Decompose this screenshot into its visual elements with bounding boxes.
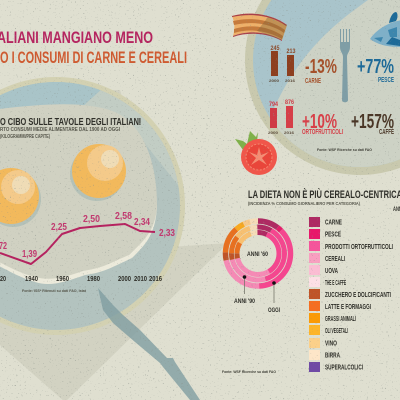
source note: trends: Fonte: WSF Ricerche su dati FAO (317, 148, 372, 152)
bars: fruit and vegetables: 2016 (284, 130, 295, 135)
line chart: food quantity: 1980 (87, 276, 100, 283)
legend: food categories: CARNE (325, 220, 342, 226)
donut labels (234, 251, 280, 314)
stat: fruit and vegetables: ORTOFRUTTICOLI (302, 129, 343, 136)
heading: food on tables (0, 117, 141, 140)
icon: tomato (235, 131, 277, 175)
title (0, 28, 187, 67)
title: O I CONSUMI DI CARNE E CEREALI (0, 48, 187, 67)
legend: food categories (309, 217, 393, 372)
bars: meat (269, 46, 296, 83)
line chart: food quantity: 2016 (149, 276, 162, 283)
bars: fruit and vegetables: 876 (285, 100, 295, 106)
line chart: food quantity: 1960 (56, 276, 69, 283)
bars: meat: 2000 (269, 78, 280, 83)
bars: meat: 213 (286, 49, 296, 55)
legend: food categories: PESCE (325, 232, 341, 238)
line chart: food quantity: 20 (0, 276, 6, 283)
icon: bacon (232, 14, 287, 41)
legend: food categories: OLI VEGETALI (325, 328, 348, 335)
line chart: food quantity (0, 211, 175, 293)
bars: fruit and vegetables (268, 100, 295, 135)
icon: fork (340, 29, 350, 102)
ring: nineties (232, 227, 284, 280)
line chart: food quantity: 2,58 (115, 211, 132, 222)
egg white (0, 205, 157, 284)
line chart: food quantity: 2,25 (51, 222, 67, 233)
line chart: food quantity: 1,39 (22, 249, 37, 260)
legend: food categories: GRASSI ANIMALI (325, 316, 356, 323)
source note: diet: Fonte: WSF Ricerche su dati FAO (222, 370, 276, 374)
heading: diet: (INCIDENZA % CONSUMO GIORNALIERO PER CATEGORIA) (248, 201, 360, 206)
line chart: food quantity: 2010 (134, 276, 147, 283)
icon: fish (370, 12, 400, 47)
legend: food categories: BIRRA (325, 352, 340, 360)
heading: food on tables: RTO CONSUMI MEDIE ALIMENTARE DAL 1900 AD OGGI (0, 127, 121, 133)
line chart: food quantity: 2,33 (159, 228, 175, 239)
line chart: food quantity: Fonte: ISS* Ritenuti su dati FAO, Istat (22, 289, 87, 293)
ring: today (226, 221, 290, 286)
donut labels: ANNI '60 (247, 251, 268, 258)
title: ALIANI MANGIANO MENO (0, 28, 153, 47)
plate: trends panel (245, 0, 400, 190)
line chart: food quantity: 2,34 (134, 217, 150, 228)
ring: sixties (237, 232, 279, 274)
heading: food on tables: (KILOGRAMMI/PRE CAPITE) (0, 134, 50, 140)
heading: diet (248, 188, 400, 213)
egg yolk left (0, 168, 41, 227)
legend: food categories: VINO (325, 340, 337, 348)
line chart: food quantity: 2000 (118, 276, 131, 283)
legend: food categories: SUPERALCOLICI (325, 364, 363, 372)
donut labels: OGGI (268, 307, 280, 314)
knife (98, 288, 200, 400)
legend: food categories: LATTE E FORMAGGI (325, 304, 371, 311)
stat: meat (305, 56, 337, 85)
bars: fruit and vegetables: 2000 (268, 130, 279, 135)
donut labels: ANNI '90 (234, 298, 255, 305)
stat: meat: -13% (305, 56, 337, 78)
line chart: food quantity: 1940 (25, 276, 38, 283)
bars: fruit and vegetables: 794 (269, 102, 279, 108)
plate: food on Italian tables (0, 77, 190, 335)
line chart: food quantity: 2,50 (83, 214, 100, 225)
stat: fruit and vegetables: +10% (302, 111, 337, 133)
legend: food categories: CEREALI (325, 256, 345, 263)
donut chart: diet share (226, 221, 290, 286)
egg yolk right (70, 144, 126, 201)
legend: food categories: THE E CAFFÈ (325, 278, 346, 287)
heading: food on tables: O CIBO SULLE TAVOLE DEGLI ITALIANI (0, 117, 141, 128)
bars: meat: 2016 (285, 78, 296, 83)
legend: food categories: UOVA (325, 268, 338, 275)
stat: meat: CARNE (305, 78, 321, 85)
bars: meat: 245 (270, 46, 280, 52)
